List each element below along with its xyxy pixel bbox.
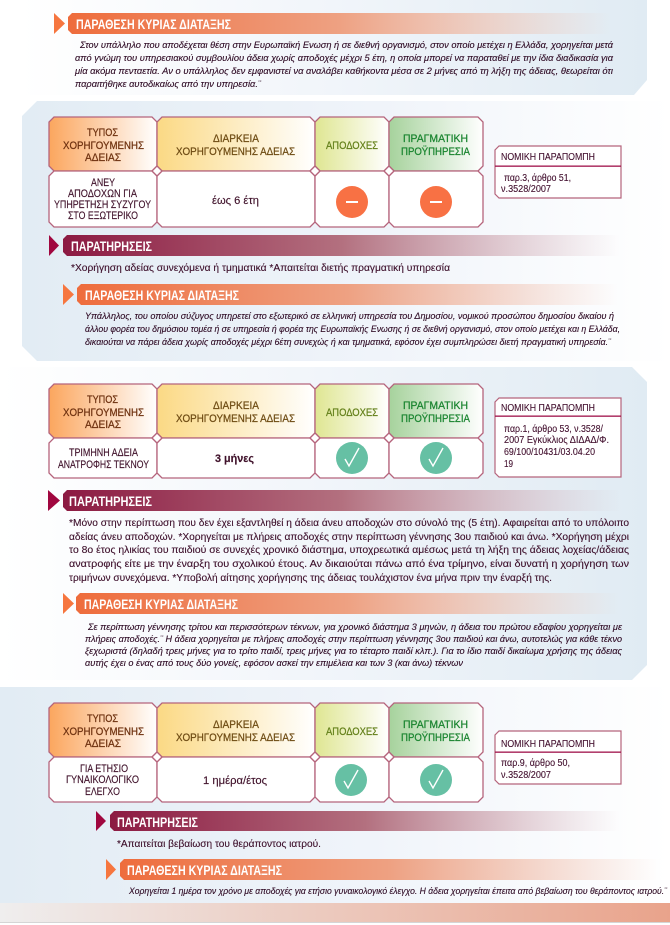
table: leave summary: ΑΝΑΤΡΟΦΗΣ ΤΕΚΝΟΥ xyxy=(58,459,150,471)
heading: remarks: ΠΑΡΑΤΗΡΗΣΕΙΣ xyxy=(71,239,152,254)
heading: main provision: ΠΑΡΑΘΕΣΗ ΚΥΡΙΑΣ ΔΙΑΤΑΞΗΣ xyxy=(84,597,238,612)
legal reference box: ΝΟΜΙΚΗ ΠΑΡΑΠΟΜΠΗ xyxy=(501,151,595,163)
legal reference box: παρ.3, άρθρο 51, xyxy=(504,172,571,184)
icon: check service xyxy=(420,442,452,474)
text block: provision: Στον υπάλληλο που αποδέχεται θέση στην Ευρωπαϊκή Ενωση ή σε διεθνή οργανισμό, στον οποίο μετέχει η Ελλάδα, χορηγείται μετά xyxy=(79,40,614,51)
table: leave summary: ΓΙΑ ΕΤΗΣΙΟ xyxy=(80,763,128,775)
table: leave summary: ΧΟΡΗΓΟΥΜΕΝΗΣ xyxy=(63,726,144,738)
legal reference box: ν.3528/2007 xyxy=(501,770,551,781)
text block: provision: Σε περίπτωση γέννησης τρίτου και περισσότερων τέκνων, για χρονικό διάστημα 3 μηνών, η άδεια του πρώτου εδαφίου χορηγείται με xyxy=(87,622,623,633)
legal reference box xyxy=(495,146,621,198)
heading: remarks: ΠΑΡΑΤΗΡΗΣΕΙΣ xyxy=(69,494,152,509)
table: leave summary: ΠΡΑΓΜΑΤΙΚΗ xyxy=(403,133,468,145)
table: leave summary: ΑΠΟΔΟΧΩΝ ΓΙΑ xyxy=(68,188,138,200)
text block: remarks: ανατροφής είτε με την έναρξη του σχολικού έτους. Αν δικαιούται πάνω από ένα τρίμηνο, είναι δυνατή η χορήγηση των xyxy=(69,558,629,570)
table: leave summary: ΔΙΑΡΚΕΙΑ xyxy=(213,719,260,731)
text block: provision: Υπάλληλος, του οποίου σύζυγος υπηρετεί στο εξωτερικό σε ελληνική υπηρεσία του Δημοσίου, νομικού προσώπου δημοσίου δικαίου ή xyxy=(85,311,614,322)
table: leave summary: ΑΔΕΙΑΣ xyxy=(85,738,121,750)
table: leave summary: ΠΡΑΓΜΑΤΙΚΗ xyxy=(403,400,468,412)
legal reference box: ΝΟΜΙΚΗ ΠΑΡΑΠΟΜΠΗ xyxy=(501,402,595,414)
table: leave summary: ΑΝΕΥ xyxy=(91,177,116,189)
text block: remarks xyxy=(69,517,630,584)
panel: three-month child-raising leave xyxy=(0,367,647,680)
heading: main provision: ΠΑΡΑΘΕΣΗ ΚΥΡΙΑΣ ΔΙΑΤΑΞΗΣ xyxy=(76,17,231,32)
table: leave summary: ΔΙΑΡΚΕΙΑ xyxy=(213,133,260,145)
icon: check salary xyxy=(335,764,367,796)
legal reference box: 69/100/10431/03.04.20 xyxy=(504,447,595,458)
heading: remarks xyxy=(49,235,620,256)
table: leave summary: ΑΔΕΙΑΣ xyxy=(85,419,121,431)
table: leave summary: 1 ημέρα/έτος xyxy=(203,775,267,787)
table: leave summary xyxy=(49,703,483,802)
legal reference box xyxy=(495,731,621,784)
heading: remarks xyxy=(48,490,620,511)
heading: remarks: ΠΑΡΑΤΗΡΗΣΕΙΣ xyxy=(117,815,198,830)
table: leave summary: ΑΠΟΔΟΧΕΣ xyxy=(326,140,378,152)
table: leave summary: ΠΡΑΓΜΑΤΙΚΗ xyxy=(403,719,468,731)
table: leave summary: ΧΟΡΗΓΟΥΜΕΝΗΣ xyxy=(63,140,144,152)
table: leave summary: ΧΟΡΗΓΟΥΜΕΝΗΣ ΑΔΕΙΑΣ xyxy=(176,413,295,425)
table: leave summary: ΧΟΡΗΓΟΥΜΕΝΗΣ xyxy=(63,407,144,419)
table: leave summary: ΑΠΟΔΟΧΕΣ xyxy=(326,726,378,738)
table: leave summary: ΑΠΟΔΟΧΕΣ xyxy=(326,407,378,419)
panel: leave without pay for spouse abroad xyxy=(22,101,670,361)
table: leave summary: ΤΥΠΟΣ xyxy=(87,127,118,139)
legal reference box: παρ.1, άρθρο 53, ν.3528/ xyxy=(504,423,603,435)
text block: provision xyxy=(85,622,623,669)
text block: remarks: *Χορήγηση αδείας συνεχόμενα ή τμηματικά *Απαιτείται διετής πραγματική υπηρεσία xyxy=(71,262,450,274)
table: leave summary: 3 μήνες xyxy=(215,453,254,465)
panel: top provision continuation xyxy=(20,0,647,95)
text block: provision: παραιτήθηκε αυτοδικαίως από την υπηρεσία.¨ xyxy=(75,79,262,90)
icon: minus service xyxy=(420,186,452,218)
text block: remarks: *Απαιτείται βεβαίωση του θεράποντος ιατρού. xyxy=(117,838,321,850)
table: leave summary xyxy=(49,117,483,227)
text block: provision: μία ακόμα πενταετία. Αν ο υπάλληλος δεν εμφανιστεί να αναλάβει καθήκοντα μέσα σε 2 μήνες από τη λήξη της άδειας, θεωρείται ότι xyxy=(74,66,613,77)
legal reference box: παρ.9, άρθρο 50, xyxy=(501,757,570,769)
table: leave summary: έως 6 έτη xyxy=(212,195,259,207)
icon: check salary xyxy=(336,442,368,474)
legal reference box: ΝΟΜΙΚΗ ΠΑΡΑΠΟΜΠΗ xyxy=(501,738,595,750)
heading: main provision xyxy=(106,859,660,880)
text block: provision: από γνώμη του υπηρεσιακού συμβουλίου άδεια χωρίς αποδοχές μέχρι 5 έτη, η οποία μπορεί να παραταθεί με την ίδια διαδικασία για xyxy=(75,53,614,64)
table: leave summary: ΤΥΠΟΣ xyxy=(87,394,118,406)
table: leave summary: ΑΔΕΙΑΣ xyxy=(85,152,121,164)
text block: remarks: το 8ο έτος ηλικίας του παιδιού σε συνεχές χρονικό διάστημα, υποχρεωτικά αμέσως μετά τη λήξη της άδειας λοχείας/άδειας xyxy=(69,544,629,556)
text block: provision: αυτής έχει ο ένας από τους δύο γονείς, εφόσον ασκεί την επιμέλεια και των 3 (και άνω) τέκνων xyxy=(85,658,463,669)
heading: main provision xyxy=(63,593,618,614)
table: leave summary: ΓΥΝΑΙΚΟΛΟΓΙΚΟ xyxy=(66,774,139,786)
heading: main provision: ΠΑΡΑΘΕΣΗ ΚΥΡΙΑΣ ΔΙΑΤΑΞΗΣ xyxy=(127,863,282,878)
panel: annual gynecological exam leave xyxy=(0,687,670,903)
table: leave summary: ΕΛΕΓΧΟ xyxy=(85,786,120,798)
table: leave summary: ΥΠΗΡΕΤΗΣΗ ΣΥΖΥΓΟΥ xyxy=(54,199,152,211)
table: leave summary: ΠΡΟΫΠΗΡΕΣΙΑ xyxy=(401,732,471,744)
legal reference box: 2007 Εγκύκλιος ΔΙΔΑΔ/Φ. xyxy=(504,434,609,446)
icon: minus salary xyxy=(336,186,368,218)
icon: check service xyxy=(420,764,452,796)
table: leave summary: ΧΟΡΗΓΟΥΜΕΝΗΣ ΑΔΕΙΑΣ xyxy=(176,732,295,744)
text block: provision: ξεχωριστά (δηλαδή τρεις μήνες για το τρίτο παιδί, τρεις μήνες για το τέταρτο παιδί κλπ.). Για το ίδιο παιδί δικαίωμα χρήσης της άδειας xyxy=(85,646,622,657)
text block: remarks: τριμήνων συνεχόμενα. *Υποβολή αίτησης χορήγησης της άδειας τουλάχιστον ένα μήνα πριν την έναρξή της. xyxy=(69,572,552,584)
table: leave summary: ΤΥΠΟΣ xyxy=(87,713,118,725)
table: leave summary: ΣΤΟ ΕΞΩΤΕΡΙΚΟ xyxy=(68,210,138,222)
legal reference box: 19 xyxy=(504,459,513,470)
heading: main provision xyxy=(63,284,618,305)
text block: provision: πλήρεις αποδοχές.¨ Η άδεια χορηγείται με πλήρεις αποδοχές στην περίπτωση γέννησης 3ου παιδιού και άνω, αυτοτελώς για κάθε τέκνο xyxy=(85,634,622,645)
heading: main provision xyxy=(54,13,611,34)
table: leave summary: ΠΡΟΫΠΗΡΕΣΙΑ xyxy=(401,413,471,425)
heading: remarks xyxy=(96,811,620,831)
text block: provision xyxy=(74,40,614,90)
legal reference box xyxy=(495,398,621,477)
text block: provision: δικαιούται να πάρει άδεια χωρίς αποδοχές μέχρι 6έτη συνεχώς ή και τμηματικά, εφόσον έχει συμπληρώσει διετή πραγματική υπηρεσία.¨ xyxy=(85,337,612,348)
table: leave summary: ΤΡΙΜΗΝΗ ΑΔΕΙΑ xyxy=(69,447,139,459)
table: leave summary: ΔΙΑΡΚΕΙΑ xyxy=(213,400,260,412)
table: leave summary: ΧΟΡΗΓΟΥΜΕΝΗΣ ΑΔΕΙΑΣ xyxy=(176,146,295,158)
text block: provision: άλλου φορέα του δημόσιου τομέα ή σε υπηρεσία ή φορέα της Ευρωπαϊκής Ενωσης ή σε διεθνή οργανισμό, στον οποίο μετέχει και η Ελλάδα, xyxy=(85,324,620,335)
text block: provision xyxy=(85,311,620,348)
legal reference box: ν.3528/2007 xyxy=(501,184,551,195)
table: leave summary: ΠΡΟΫΠΗΡΕΣΙΑ xyxy=(401,146,471,158)
text block: remarks: *Μόνο στην περίπτωση που δεν έχει εξαντληθεί η άδεια άνευ αποδοχών στο σύνολό της (5 έτη). Αφαιρείται από το υπόλοιπο xyxy=(69,517,629,529)
table: leave summary xyxy=(49,384,483,478)
text block: remarks: αδείας άνευ αποδοχών. *Χορηγείται με πλήρεις αποδοχές στην περίπτωση γέννησης 3ου παιδιού και άνω. *Χορήγηση μέχρι xyxy=(69,531,630,543)
heading: main provision: ΠΑΡΑΘΕΣΗ ΚΥΡΙΑΣ ΔΙΑΤΑΞΗΣ xyxy=(85,288,239,303)
footer band xyxy=(0,903,670,923)
